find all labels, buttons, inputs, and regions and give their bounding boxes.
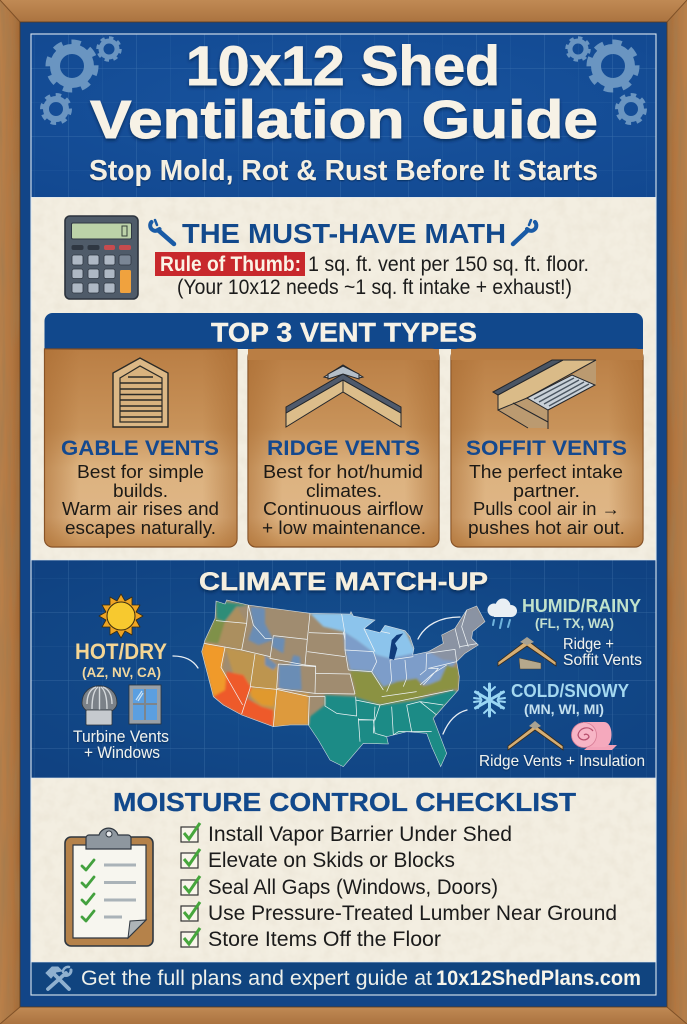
group: humid/rainy xyxy=(488,596,642,669)
text: gable description: Warm air rises and xyxy=(62,499,219,519)
text: hot/dry recommendation: + Windows xyxy=(84,744,160,762)
text: ridge description: Continuous airflow xyxy=(263,499,424,519)
label: cold states: (MN, WI, MI) xyxy=(524,702,604,717)
panel: must-have math xyxy=(31,197,656,560)
icon: right wrench xyxy=(513,220,536,244)
text: humid recommendation: Ridge + xyxy=(563,636,614,653)
icon: insulation roll xyxy=(572,722,617,750)
label: soffit vents: SOFFIT VENTS xyxy=(466,437,627,460)
text: soffit description: pushes hot air out. xyxy=(468,518,625,538)
text: soffit description: The perfect intake xyxy=(469,462,623,482)
title: 10x12 Shed xyxy=(186,34,500,97)
text: ridge description: Best for hot/humid xyxy=(263,462,423,482)
group: hot/dry xyxy=(73,594,169,762)
heading: moisture control: MOISTURE CONTROL CHECKLIST xyxy=(113,787,576,817)
text: call to action: 10x12ShedPlans.com xyxy=(436,967,641,990)
text: gable description xyxy=(62,462,219,538)
text: soffit description xyxy=(468,462,625,538)
label: hot/dry: HOT/DRY xyxy=(75,639,167,664)
heading: must-have math: THE MUST-HAVE MATH xyxy=(182,218,506,249)
footer banner xyxy=(31,962,656,995)
icon: ridge vent xyxy=(508,721,563,750)
item: vapor barrier: Install Vapor Barrier Under Shed xyxy=(208,822,512,846)
icon: calculator xyxy=(65,216,138,299)
icon: left gears xyxy=(42,38,120,123)
text: call to action xyxy=(81,967,641,990)
item: lumber: Use Pressure-Treated Lumber Near Ground xyxy=(208,901,617,925)
subtitle: Stop Mold, Rot & Rust Before It Starts xyxy=(89,155,598,187)
rule text: 1 sq. ft. vent per 150 sq. ft. floor. xyxy=(308,253,589,276)
text: hot/dry recommendation xyxy=(73,728,169,762)
label: ridge vents: RIDGE VENTS xyxy=(267,437,420,460)
heading bar xyxy=(44,313,643,349)
callout arrows xyxy=(173,617,467,734)
text: cold recommendation: Ridge Vents + Insulation xyxy=(479,753,645,770)
rule text: (Your 10x12 needs ~1 sq. ft intake + exhaust!) xyxy=(177,276,572,299)
checklist items xyxy=(181,822,617,951)
text: call to action: Get the full plans and expert guide at xyxy=(81,967,432,990)
icon: ridge vent xyxy=(286,365,401,427)
icon: soffit vent xyxy=(493,360,596,429)
icon: turbine vent xyxy=(82,686,117,725)
panel: climate match-up xyxy=(31,560,656,778)
title: Ventilation Guide xyxy=(90,90,598,150)
header panel xyxy=(31,34,656,197)
label: humid/rainy: HUMID/RAINY xyxy=(522,596,641,616)
icon: sun xyxy=(99,594,143,638)
title xyxy=(90,34,598,150)
heading bar: TOP 3 VENT TYPES xyxy=(211,318,477,348)
icon: clipboard xyxy=(65,828,153,946)
text: humid recommendation xyxy=(563,636,642,669)
rule text xyxy=(177,253,589,299)
icon: gable vent xyxy=(113,358,168,427)
card: ridge vents xyxy=(248,349,439,547)
label: gable vents: GABLE VENTS xyxy=(61,437,219,460)
card: gable vents xyxy=(44,349,237,547)
text: ridge description xyxy=(262,462,426,538)
text: ridge description: + low maintenance. xyxy=(262,518,426,538)
panel: top 3 vent types xyxy=(44,313,643,547)
label: humid states: (FL, TX, WA) xyxy=(535,616,614,631)
text: soffit description: partner. xyxy=(513,481,580,501)
map of the United States xyxy=(201,600,486,768)
text: gable description: Best for simple xyxy=(77,462,204,482)
icon: snowflake xyxy=(474,684,505,716)
item: elevate: Elevate on Skids or Blocks xyxy=(208,848,455,872)
label: cold/snowy: COLD/SNOWY xyxy=(511,681,629,701)
text: gable description: builds. xyxy=(113,481,168,501)
icon: tools xyxy=(46,967,71,989)
icon: left wrench xyxy=(150,220,174,244)
icon: right gears xyxy=(567,38,645,123)
text: hot/dry recommendation: Turbine Vents xyxy=(73,728,169,746)
icon: ridge and soffit xyxy=(498,637,556,669)
group: cold/snowy xyxy=(474,681,645,770)
text: humid recommendation: Soffit Vents xyxy=(563,652,642,669)
card: soffit vents xyxy=(451,349,643,547)
rule of thumb highlight: Rule of Thumb: xyxy=(160,253,301,276)
item: store off floor: Store Items Off the Floor xyxy=(208,927,441,951)
panel: moisture control checklist xyxy=(31,778,656,962)
icon: window xyxy=(129,685,161,724)
icon: rain cloud xyxy=(488,598,517,628)
text: ridge description: climates. xyxy=(306,481,382,501)
text: soffit description: Pulls cool air in → xyxy=(473,499,620,519)
item: seal gaps: Seal All Gaps (Windows, Doors) xyxy=(208,875,498,899)
heading: climate match-up: CLIMATE MATCH-UP xyxy=(199,568,488,596)
label: hot/dry states: (AZ, NV, CA) xyxy=(82,664,161,680)
text: gable description: escapes naturally. xyxy=(65,518,216,538)
